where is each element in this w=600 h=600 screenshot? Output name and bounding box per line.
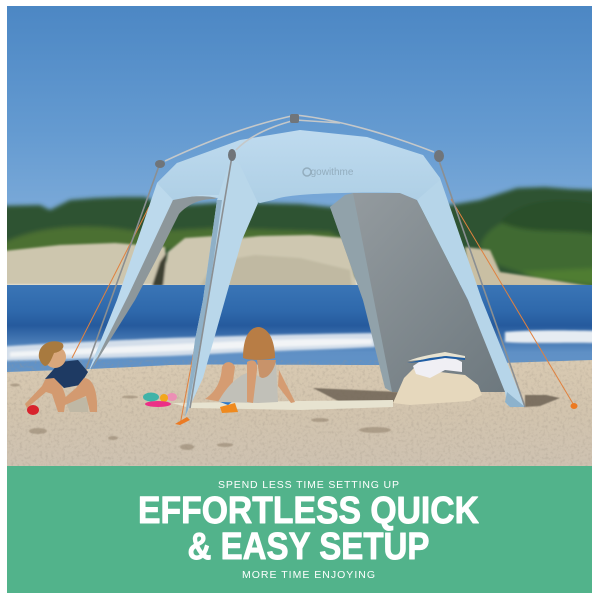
white towels — [413, 356, 462, 378]
corner foot of right leg — [505, 392, 525, 407]
frame hub and joints — [155, 114, 444, 168]
tree line on far shore — [0, 187, 600, 290]
guy lines — [72, 199, 575, 425]
back left leg — [87, 162, 219, 374]
breaking waves — [0, 330, 600, 361]
sky — [7, 6, 592, 221]
girl upper back — [257, 360, 276, 380]
sand grain texture — [7, 360, 592, 466]
front left leg — [185, 191, 258, 417]
ocean — [7, 285, 592, 375]
orange tent stakes — [175, 403, 578, 425]
red toy bucket — [27, 405, 39, 415]
boy playing in sand — [25, 341, 97, 415]
tent roof canopy — [157, 130, 440, 203]
boy shorts — [67, 398, 88, 412]
headline line two: & EASY SETUP — [188, 526, 430, 568]
caption bottom line: MORE TIME ENJOYING — [242, 569, 375, 581]
frame poles — [85, 155, 525, 408]
boy left leg and arm — [25, 376, 66, 412]
beach bag with towels and book — [393, 352, 482, 405]
tent — [85, 114, 525, 417]
boy navy shirt — [45, 360, 88, 388]
girl striped dress — [218, 362, 278, 403]
beach photo scene — [0, 6, 600, 466]
beach towel — [172, 400, 393, 410]
side wall seam — [330, 193, 392, 392]
limestone cliffs — [7, 234, 591, 285]
boy right leg and arm — [65, 378, 98, 412]
girl hair — [243, 327, 275, 360]
girl arms — [247, 360, 295, 403]
sand footprints and shadows — [10, 384, 391, 450]
canvas bag — [393, 368, 482, 405]
girl legs — [205, 362, 235, 402]
headline line one: EFFORTLESS QUICK — [138, 490, 479, 532]
tent shadow on sand — [313, 388, 560, 407]
girl sitting — [205, 327, 295, 403]
right leg — [416, 155, 524, 406]
boy head and hair — [48, 348, 66, 368]
blue book — [408, 352, 465, 361]
green caption banner — [7, 466, 592, 593]
caption top line: SPEND LESS TIME SETTING UP — [218, 479, 399, 491]
colorful beach toys — [143, 392, 238, 413]
back left leg inner lining — [90, 196, 217, 372]
shaded side wall — [330, 193, 508, 392]
brand logo on canopy: gowithme — [311, 167, 354, 178]
top frame rods — [165, 115, 434, 161]
sand beach — [7, 360, 592, 466]
front leg shading — [185, 200, 222, 417]
